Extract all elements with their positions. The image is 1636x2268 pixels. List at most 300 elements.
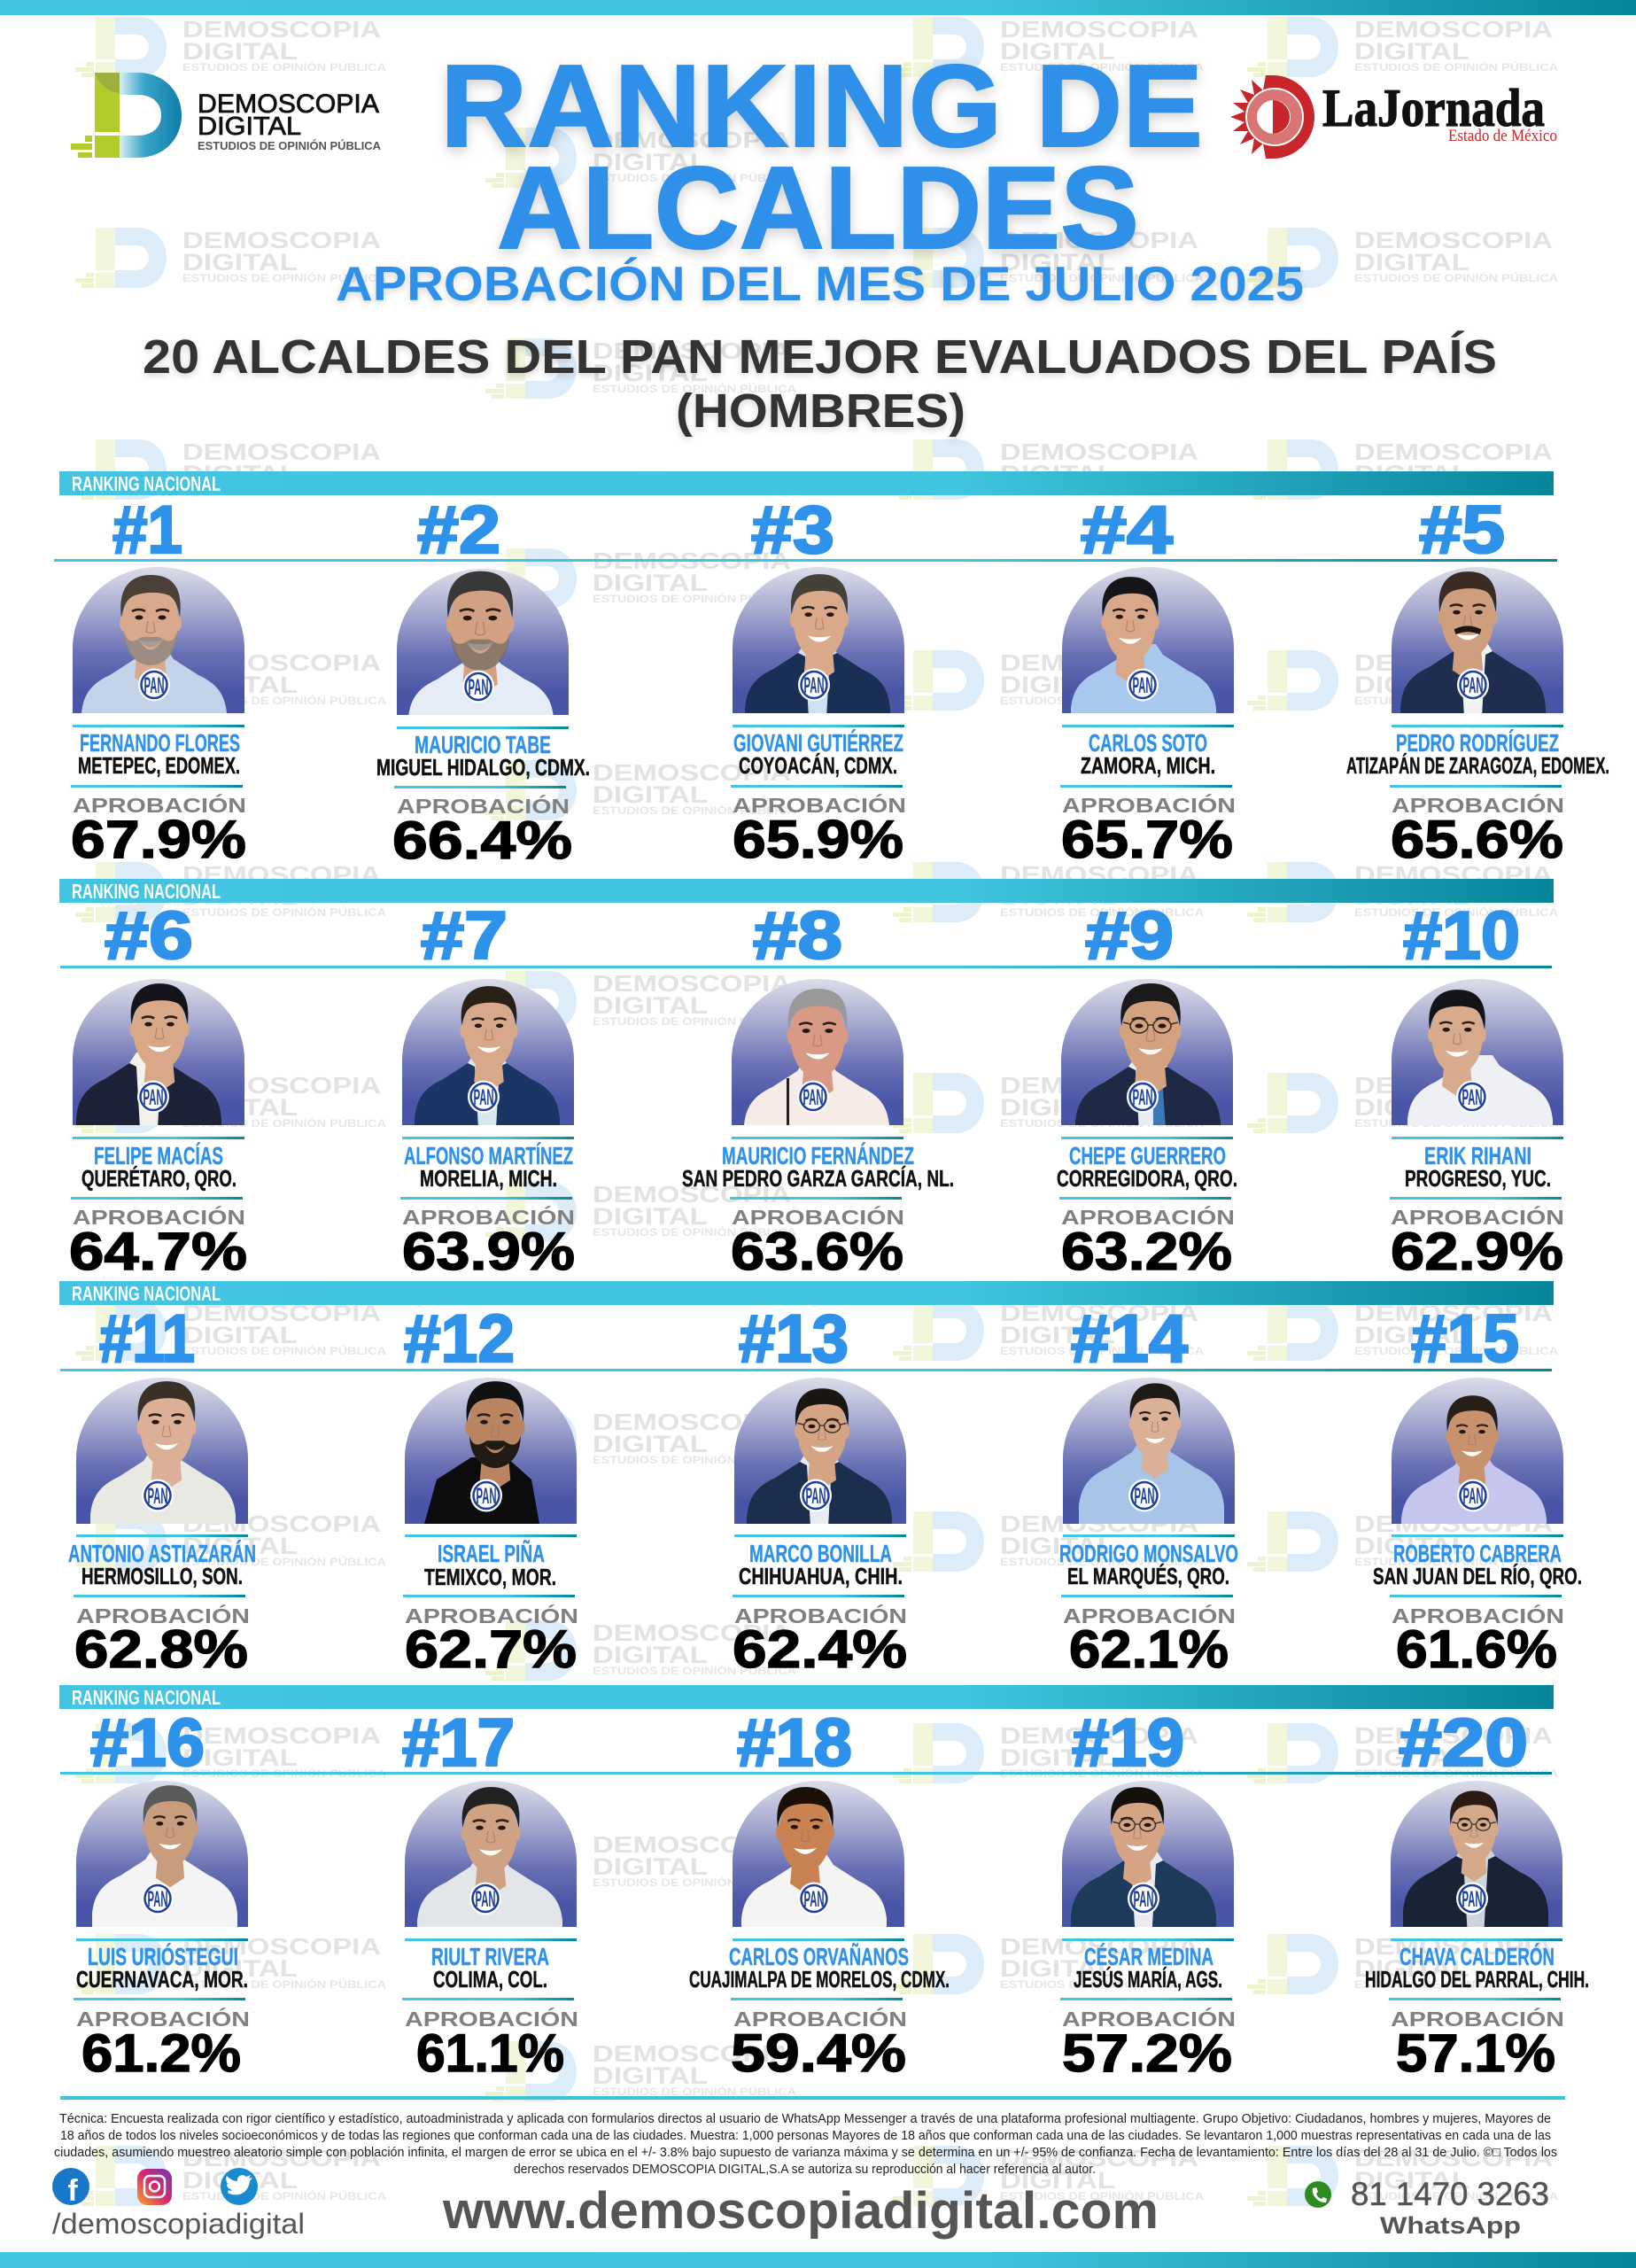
- logo: Demoscopia Digital: [71, 73, 382, 158]
- top gradient bar: [0, 0, 1636, 15]
- section bar row 4: [59, 1685, 1554, 1709]
- watermark pattern: ESTUDIOS DE OPINIÓN PÚBLICA: [1354, 694, 1558, 707]
- approval value: 65.7%: [1061, 810, 1233, 869]
- watermark pattern: DIGITAL: [182, 38, 298, 65]
- rank: #8: [753, 898, 842, 974]
- watermark pattern: DEMOSCOPIA: [182, 16, 381, 43]
- city: CUAJIMALPA DE MORELOS, CDMX.: [689, 1966, 950, 1992]
- watermark pattern: DEMOSCOPIA: [593, 1181, 791, 1208]
- watermark pattern: DIGITAL: [1000, 2167, 1115, 2194]
- methodology text: [54, 2111, 1557, 2177]
- city: MIGUEL HIDALGO, CDMX.: [376, 754, 590, 781]
- logo: Demoscopia Digital: DEMOSCOPIA: [198, 89, 379, 119]
- photo: PAN: [804, 1887, 824, 1912]
- watermark pattern: ESTUDIOS DE OPINIÓN PÚBLICA: [593, 592, 796, 605]
- approval label: APROBACIÓN: [1063, 1604, 1236, 1627]
- watermark pattern: DEMOSCOPIA: [1000, 16, 1198, 43]
- approval value: 61.2%: [81, 2023, 241, 2083]
- logo: Demoscopia Digital: DIGITAL: [198, 113, 301, 141]
- card #20: [1365, 1705, 1589, 2083]
- photo: PAN: [473, 1085, 494, 1110]
- city: COLIMA, COL.: [433, 1966, 547, 1992]
- watermark pattern: DEMOSCOPIA: [593, 1831, 791, 1858]
- watermark pattern: ESTUDIOS DE OPINIÓN PÚBLICA: [182, 1116, 386, 1130]
- approval label: APROBACIÓN: [1392, 793, 1564, 817]
- watermark pattern: DIGITAL: [593, 1431, 708, 1457]
- city: CORREGIDORA, QRO.: [1057, 1165, 1237, 1192]
- card #8: [682, 898, 954, 1281]
- card #17: [402, 1705, 578, 2083]
- photo: [1391, 1781, 1562, 1968]
- heading: (HOMBRES): [676, 384, 965, 438]
- watermark pattern: DIGITAL: [1354, 249, 1469, 276]
- watermark pattern: DIGITAL: [593, 781, 708, 808]
- card #4: [1060, 493, 1236, 869]
- photo: PAN: [1463, 1484, 1483, 1509]
- watermark pattern: DEMOSCOPIA: [1000, 649, 1198, 676]
- watermark pattern: DEMOSCOPIA: [1000, 1933, 1198, 1960]
- watermark pattern: ESTUDIOS DE OPINIÓN PÚBLICA: [1354, 1977, 1558, 1991]
- watermark pattern: DIGITAL: [593, 992, 708, 1019]
- watermark pattern: DIGITAL: [593, 1642, 708, 1668]
- watermark pattern: DIGITAL: [182, 1955, 298, 1982]
- photo: [405, 1781, 577, 1927]
- card #2: [376, 493, 590, 870]
- approval value: 65.9%: [733, 810, 903, 869]
- watermark pattern: DIGITAL: [593, 1853, 708, 1880]
- methodology text: derechos reservados DEMOSCOPIA DIGITAL,S.A se autoriza su reproducción al hacer referencia al autor.: [514, 2162, 1096, 2177]
- watermark pattern: DIGITAL: [1000, 1094, 1115, 1121]
- name: CARLOS SOTO: [1089, 729, 1207, 757]
- card #9: [1057, 898, 1237, 1281]
- rank: #15: [1411, 1301, 1519, 1377]
- approval label: APROBACIÓN: [1391, 1205, 1564, 1229]
- photo: [76, 1378, 248, 1524]
- watermark pattern: ESTUDIOS DE OPINIÓN PÚBLICA: [1354, 1116, 1558, 1130]
- approval label: APROBACIÓN: [1061, 1205, 1235, 1229]
- watermark pattern: DIGITAL: [1000, 1744, 1115, 1771]
- rank: #3: [751, 493, 834, 568]
- watermark pattern: DEMOSCOPIA: [1354, 1722, 1553, 1749]
- photo: PAN: [1462, 1085, 1483, 1110]
- watermark pattern: DEMOSCOPIA: [182, 2145, 381, 2171]
- logo: La Jornada: Estado de México: [1448, 127, 1557, 145]
- name: CARLOS ORVAÑANOS: [729, 1943, 909, 1970]
- watermark pattern: DIGITAL: [1000, 38, 1115, 65]
- city: JESÚS MARÍA, AGS.: [1074, 1966, 1222, 1992]
- approval label: APROBACIÓN: [405, 2007, 578, 2031]
- watermark pattern: DEMOSCOPIA: [1000, 861, 1198, 888]
- watermark pattern: DEMOSCOPIA: [1000, 439, 1198, 465]
- rank: #13: [739, 1301, 849, 1377]
- icon: whatsapp: [1305, 2181, 1331, 2208]
- watermark pattern: DIGITAL: [182, 1744, 298, 1771]
- watermark pattern: DEMOSCOPIA: [1354, 649, 1553, 676]
- approval label: APROBACIÓN: [76, 2007, 250, 2031]
- photo: PAN: [1462, 1887, 1483, 1912]
- watermark pattern: DIGITAL: [1354, 883, 1469, 910]
- photo: PAN: [143, 673, 165, 698]
- watermark pattern: DEMOSCOPIA: [1354, 861, 1553, 888]
- photo: PAN: [1134, 1887, 1153, 1912]
- city: QUERÉTARO, QRO.: [81, 1165, 236, 1192]
- watermark pattern: ESTUDIOS DE OPINIÓN PÚBLICA: [182, 60, 386, 74]
- watermark pattern: DEMOSCOPIA: [593, 1619, 791, 1646]
- social handle: /demoscopiadigital: [52, 2208, 305, 2240]
- watermark pattern: ESTUDIOS DE OPINIÓN PÚBLICA: [1354, 60, 1558, 74]
- photo: [1062, 567, 1234, 713]
- watermark pattern: DIGITAL: [1354, 461, 1469, 487]
- approval value: 62.4%: [733, 1619, 907, 1679]
- card #15: [1373, 1301, 1582, 1679]
- watermark pattern: DEMOSCOPIA: [1354, 1511, 1553, 1537]
- watermark pattern: DEMOSCOPIA: [1000, 1300, 1198, 1326]
- photo: PAN: [143, 1085, 163, 1110]
- watermark pattern: DEMOSCOPIA: [1354, 16, 1553, 43]
- photo: [1392, 979, 1563, 1125]
- watermark pattern: DIGITAL: [1000, 883, 1115, 910]
- watermark pattern: ESTUDIOS DE OPINIÓN PÚBLICA: [1000, 1116, 1204, 1130]
- rank: #14: [1071, 1301, 1188, 1377]
- icon: instagram: [137, 2169, 172, 2205]
- name: RODRIGO MONSALVO: [1059, 1540, 1238, 1567]
- watermark pattern: DEMOSCOPIA: [182, 1072, 381, 1099]
- watermark pattern: DIGITAL: [182, 672, 298, 698]
- watermark pattern: DEMOSCOPIA: [1000, 2145, 1198, 2171]
- approval label: APROBACIÓN: [1391, 2007, 1564, 2031]
- city: METEPEC, EDOMEX.: [78, 752, 240, 779]
- watermark pattern: DEMOSCOPIA: [593, 127, 791, 153]
- card #16: [74, 1705, 250, 2083]
- watermark pattern: ESTUDIOS DE OPINIÓN PÚBLICA: [1000, 60, 1204, 74]
- watermark pattern: ESTUDIOS DE OPINIÓN PÚBLICA: [593, 1876, 796, 1889]
- card #19: [1060, 1705, 1236, 2083]
- name: MARCO BONILLA: [749, 1540, 892, 1567]
- photo: [405, 1378, 577, 1524]
- watermark pattern: ESTUDIOS DE OPINIÓN PÚBLICA: [1000, 1555, 1204, 1568]
- rank: #10: [1403, 898, 1520, 974]
- watermark pattern: DIGITAL: [1354, 38, 1469, 65]
- approval label: APROBACIÓN: [76, 1604, 250, 1627]
- watermark pattern: DIGITAL: [182, 249, 298, 276]
- photo: [733, 1781, 904, 1927]
- card #1: [71, 493, 246, 869]
- watermark pattern: ESTUDIOS DE OPINIÓN PÚBLICA: [1000, 1977, 1204, 1991]
- photo: [732, 979, 903, 1125]
- name: ALFONSO MARTÍNEZ: [404, 1142, 573, 1169]
- photo: [1062, 1781, 1234, 1972]
- photo: [1063, 1378, 1235, 1524]
- photo: PAN: [806, 1484, 826, 1509]
- photo: [73, 979, 244, 1125]
- watermark pattern: ESTUDIOS DE OPINIÓN PÚBLICA: [182, 2189, 386, 2202]
- watermark pattern: ESTUDIOS DE OPINIÓN PÚBLICA: [182, 694, 386, 707]
- subtitle: APROBACIÓN DEL MES DE JULIO 2025: [336, 256, 1304, 311]
- watermark pattern: DIGITAL: [593, 570, 708, 596]
- watermark pattern: ESTUDIOS DE OPINIÓN PÚBLICA: [593, 1664, 796, 1677]
- watermark pattern: DIGITAL: [1000, 1322, 1115, 1348]
- watermark pattern: DIGITAL: [1354, 1533, 1469, 1559]
- watermark pattern: DEMOSCOPIA: [593, 1409, 791, 1435]
- watermark pattern: ESTUDIOS DE OPINIÓN PÚBLICA: [593, 1225, 796, 1239]
- name: CHAVA CALDERÓN: [1400, 1943, 1555, 1970]
- watermark pattern: DEMOSCOPIA: [593, 548, 791, 574]
- rank: #18: [737, 1705, 852, 1781]
- photo: PAN: [475, 1887, 496, 1912]
- rank: #11: [99, 1301, 195, 1377]
- watermark pattern: DEMOSCOPIA: [1000, 1722, 1198, 1749]
- heading: [143, 330, 1497, 438]
- footer divider: [60, 2096, 1565, 2100]
- approval value: 57.1%: [1396, 2023, 1555, 2083]
- approval value: 57.2%: [1062, 2023, 1232, 2083]
- approval label: APROBACIÓN: [73, 1205, 245, 1229]
- icon: twitter: [221, 2168, 258, 2205]
- rank: #7: [421, 898, 508, 974]
- approval value: 63.2%: [1061, 1222, 1232, 1281]
- watermark pattern: DEMOSCOPIA: [182, 1722, 381, 1749]
- photo: [1061, 979, 1233, 1125]
- watermark pattern: DEMOSCOPIA: [1354, 1072, 1553, 1099]
- rank: #2: [417, 493, 500, 568]
- icon: facebook: f: [67, 2174, 78, 2208]
- section bar row 1: RANKING NACIONAL: [72, 472, 221, 495]
- title: RANKING DE: [440, 41, 1203, 171]
- watermark pattern: DIGITAL: [1354, 1322, 1469, 1348]
- watermark pattern: DEMOSCOPIA: [1354, 227, 1553, 253]
- section bar row 1: [59, 471, 1554, 495]
- watermark pattern: DEMOSCOPIA: [593, 2040, 791, 2067]
- name: ERIK RIHANI: [1424, 1142, 1531, 1169]
- watermark pattern: ESTUDIOS DE OPINIÓN PÚBLICA: [1354, 271, 1558, 284]
- watermark pattern: DIGITAL: [1354, 1744, 1469, 1771]
- city: HERMOSILLO, SON.: [81, 1563, 243, 1589]
- approval value: 62.1%: [1069, 1619, 1229, 1679]
- city: TEMIXCO, MOR.: [424, 1564, 556, 1590]
- watermark pattern: DIGITAL: [1000, 249, 1115, 276]
- photo: PAN: [1132, 1085, 1153, 1110]
- name: MAURICIO TABE: [415, 731, 551, 758]
- watermark pattern: ESTUDIOS DE OPINIÓN PÚBLICA: [593, 1453, 796, 1466]
- watermark pattern: ESTUDIOS DE OPINIÓN PÚBLICA: [593, 804, 796, 817]
- whatsapp label: WhatsApp: [1380, 2212, 1521, 2239]
- city: COYOACÁN, CDMX.: [739, 752, 897, 779]
- name: GIOVANI GUTIÉRREZ: [733, 729, 903, 757]
- section bar row 2: RANKING NACIONAL: [72, 880, 221, 903]
- photo: PAN: [802, 1085, 824, 1110]
- title: [440, 41, 1203, 273]
- watermark pattern: DEMOSCOPIA: [182, 1511, 381, 1537]
- city: CUERNAVACA, MOR.: [76, 1966, 248, 1992]
- watermark pattern: ESTUDIOS DE OPINIÓN PÚBLICA: [1000, 1767, 1204, 1780]
- city: EL MARQUÉS, QRO.: [1067, 1563, 1229, 1589]
- watermark pattern: DEMOSCOPIA: [593, 338, 791, 364]
- watermark pattern: ESTUDIOS DE OPINIÓN PÚBLICA: [182, 1977, 386, 1991]
- watermark pattern: DEMOSCOPIA: [1000, 1072, 1198, 1099]
- name: ISRAEL PIÑA: [438, 1540, 545, 1567]
- watermark pattern: ESTUDIOS DE OPINIÓN PÚBLICA: [1354, 2189, 1558, 2202]
- photo: [734, 1378, 906, 1524]
- watermark pattern: DIGITAL: [1354, 672, 1469, 698]
- watermark pattern: DIGITAL: [593, 149, 708, 175]
- approval label: APROBACIÓN: [733, 2007, 907, 2031]
- photo: PAN: [1132, 673, 1153, 698]
- watermark pattern: ESTUDIOS DE OPINIÓN PÚBLICA: [593, 1014, 796, 1028]
- watermark pattern: DIGITAL: [1354, 2167, 1469, 2194]
- photo: [76, 1781, 248, 1927]
- rank: #20: [1399, 1705, 1528, 1781]
- rank: #12: [404, 1301, 515, 1377]
- watermark pattern: DIGITAL: [182, 1533, 298, 1559]
- watermark pattern: ESTUDIOS DE OPINIÓN PÚBLICA: [1000, 694, 1204, 707]
- approval value: 59.4%: [731, 2023, 906, 2083]
- rank: #5: [1419, 493, 1505, 568]
- card #18: [689, 1705, 950, 2083]
- section bar row 3: RANKING NACIONAL: [72, 1282, 221, 1305]
- card #5: [1346, 493, 1609, 869]
- watermark pattern: DEMOSCOPIA: [1000, 227, 1198, 253]
- name: LUIS URIÓSTEGUI: [88, 1943, 238, 1970]
- photo: PAN: [1134, 1484, 1155, 1509]
- card #13: [733, 1301, 907, 1679]
- logo: La Jornada: LaJornada: [1322, 79, 1545, 137]
- watermark pattern: ESTUDIOS DE OPINIÓN PÚBLICA: [182, 1344, 386, 1357]
- photo: [397, 569, 569, 715]
- watermark pattern: ESTUDIOS DE OPINIÓN PÚBLICA: [1000, 2189, 1204, 2202]
- approval value: 61.1%: [416, 2023, 564, 2083]
- rank: #9: [1085, 898, 1174, 974]
- city: PROGRESO, YUC.: [1405, 1165, 1551, 1192]
- watermark pattern: DIGITAL: [182, 1322, 298, 1348]
- watermark pattern: DEMOSCOPIA: [182, 1300, 381, 1326]
- watermark pattern: ESTUDIOS DE OPINIÓN PÚBLICA: [1354, 1767, 1558, 1780]
- watermark pattern: DEMOSCOPIA: [182, 439, 381, 465]
- heading: 20 ALCALDES DEL PAN MEJOR EVALUADOS DEL PAÍS: [143, 330, 1497, 384]
- approval label: APROBACIÓN: [405, 1604, 578, 1627]
- watermark pattern: DEMOSCOPIA: [593, 759, 791, 786]
- watermark pattern: ESTUDIOS DE OPINIÓN PÚBLICA: [593, 2085, 796, 2098]
- photo: PAN: [147, 1887, 168, 1912]
- section bar row 3: [59, 1281, 1554, 1305]
- watermark pattern: ESTUDIOS DE OPINIÓN PÚBLICA: [182, 271, 386, 284]
- watermark pattern: DEMOSCOPIA: [1000, 1511, 1198, 1537]
- approval label: APROBACIÓN: [73, 793, 246, 817]
- photo: PAN: [468, 675, 489, 700]
- card #6: [69, 898, 247, 1281]
- website: www.demoscopiadigital.com: [442, 2182, 1159, 2240]
- rank: #1: [112, 493, 182, 568]
- approval value: 66.4%: [392, 811, 572, 870]
- name: CHEPE GUERRERO: [1069, 1142, 1226, 1169]
- name: CÉSAR MEDINA: [1084, 1943, 1213, 1970]
- approval value: 67.9%: [71, 810, 246, 869]
- approval value: 61.6%: [1396, 1619, 1557, 1679]
- watermark pattern: ESTUDIOS DE OPINIÓN PÚBLICA: [593, 171, 796, 184]
- watermark pattern: ESTUDIOS DE OPINIÓN PÚBLICA: [182, 905, 386, 919]
- watermark pattern: DIGITAL: [182, 2167, 298, 2194]
- title: ALCALDES: [497, 143, 1139, 273]
- logo: Demoscopia Digital: ESTUDIOS DE OPINIÓN PÚBLICA: [198, 139, 382, 152]
- watermark pattern: DIGITAL: [593, 360, 708, 386]
- card #14: [1059, 1301, 1238, 1679]
- watermark pattern: ESTUDIOS DE OPINIÓN PÚBLICA: [593, 382, 796, 395]
- rank: #19: [1072, 1705, 1184, 1781]
- name: RIULT RIVERA: [431, 1943, 549, 1970]
- approval value: 64.7%: [69, 1222, 247, 1281]
- watermark pattern: DIGITAL: [1000, 1955, 1115, 1982]
- watermark pattern: DIGITAL: [182, 461, 298, 487]
- approval label: APROBACIÓN: [1062, 793, 1236, 817]
- approval label: APROBACIÓN: [733, 793, 906, 817]
- photo: PAN: [804, 673, 824, 698]
- approval label: APROBACIÓN: [397, 794, 570, 818]
- city: SAN PEDRO GARZA GARCÍA, NL.: [682, 1165, 954, 1192]
- watermark pattern: DIGITAL: [593, 1203, 708, 1230]
- watermark pattern: DIGITAL: [1000, 461, 1115, 487]
- card #12: [403, 1301, 578, 1679]
- methodology text: Técnica: Encuesta realizada con rigor científico y estadístico, autoadministrada y aplicada con formularios directos al usuario de WhatsApp Messenger a través de una plataforma profesional multiagente. Grupo Objetivo: Ciudadanos, hombres y mujeres, Mayores de: [59, 2111, 1551, 2126]
- photo: [733, 567, 904, 713]
- approval value: 62.8%: [74, 1619, 248, 1679]
- watermark pattern: ESTUDIOS DE OPINIÓN PÚBLICA: [1354, 1555, 1558, 1568]
- approval value: 62.7%: [405, 1619, 577, 1679]
- watermark pattern: ESTUDIOS DE OPINIÓN PÚBLICA: [182, 1767, 386, 1780]
- methodology text: ciudades, asumiendo muestreo aleatorio simple con población infinita, el margen de error se ubica en el +/- 3.8% bajo supuesto de varianza máxima y se determina en un +/- 95% de confianza. Fecha de levantamiento: Entre los días del 28 al 31 de Julio. ©□ Todos los: [54, 2145, 1557, 2160]
- approval label: APROBACIÓN: [402, 1205, 575, 1229]
- watermark pattern: DEMOSCOPIA: [182, 649, 381, 676]
- name: ANTONIO ASTIAZARÁN: [68, 1540, 256, 1567]
- watermark pattern: ESTUDIOS DE OPINIÓN PÚBLICA: [1000, 271, 1204, 284]
- rank: #16: [90, 1705, 205, 1781]
- name: PEDRO RODRÍGUEZ: [1396, 729, 1559, 757]
- approval label: APROBACIÓN: [734, 1604, 907, 1627]
- name: FELIPE MACÍAS: [94, 1142, 223, 1169]
- photo: PAN: [477, 1484, 496, 1509]
- watermark pattern: DIGITAL: [1000, 1533, 1115, 1559]
- card #3: [731, 493, 906, 869]
- icon: facebook: [52, 2168, 89, 2208]
- photo: PAN: [147, 1484, 168, 1509]
- photo: [402, 979, 574, 1125]
- watermark pattern: DEMOSCOPIA: [1354, 2145, 1553, 2171]
- photo: [73, 567, 244, 713]
- approval value: 65.6%: [1391, 810, 1563, 869]
- approval value: 63.9%: [402, 1222, 575, 1281]
- watermark pattern: ESTUDIOS DE OPINIÓN PÚBLICA: [1354, 905, 1558, 919]
- city: CHIHUAHUA, CHIH.: [739, 1563, 903, 1589]
- watermark pattern: DEMOSCOPIA: [593, 970, 791, 997]
- watermark pattern: ESTUDIOS DE OPINIÓN PÚBLICA: [182, 1555, 386, 1568]
- watermark pattern: DEMOSCOPIA: [182, 1933, 381, 1960]
- watermark pattern: DEMOSCOPIA: [182, 861, 381, 888]
- card #7: [400, 898, 575, 1281]
- rank: #4: [1081, 493, 1173, 568]
- rank: #17: [402, 1705, 515, 1781]
- photo: [1392, 1378, 1563, 1524]
- approval label: APROBACIÓN: [1062, 2007, 1236, 2031]
- watermark pattern: ESTUDIOS DE OPINIÓN PÚBLICA: [1354, 1344, 1558, 1357]
- card #10: [1390, 898, 1564, 1281]
- approval label: APROBACIÓN: [1392, 1604, 1564, 1627]
- photo: PAN: [1463, 673, 1483, 698]
- approval label: APROBACIÓN: [732, 1205, 904, 1229]
- name: FERNANDO FLORES: [80, 729, 240, 757]
- watermark pattern: DEMOSCOPIA: [1354, 1933, 1553, 1960]
- watermark pattern: DIGITAL: [593, 2062, 708, 2089]
- watermark pattern: DIGITAL: [1000, 672, 1115, 698]
- watermark pattern: DEMOSCOPIA: [1354, 1300, 1553, 1326]
- watermark pattern: ESTUDIOS DE OPINIÓN PÚBLICA: [1000, 1344, 1204, 1357]
